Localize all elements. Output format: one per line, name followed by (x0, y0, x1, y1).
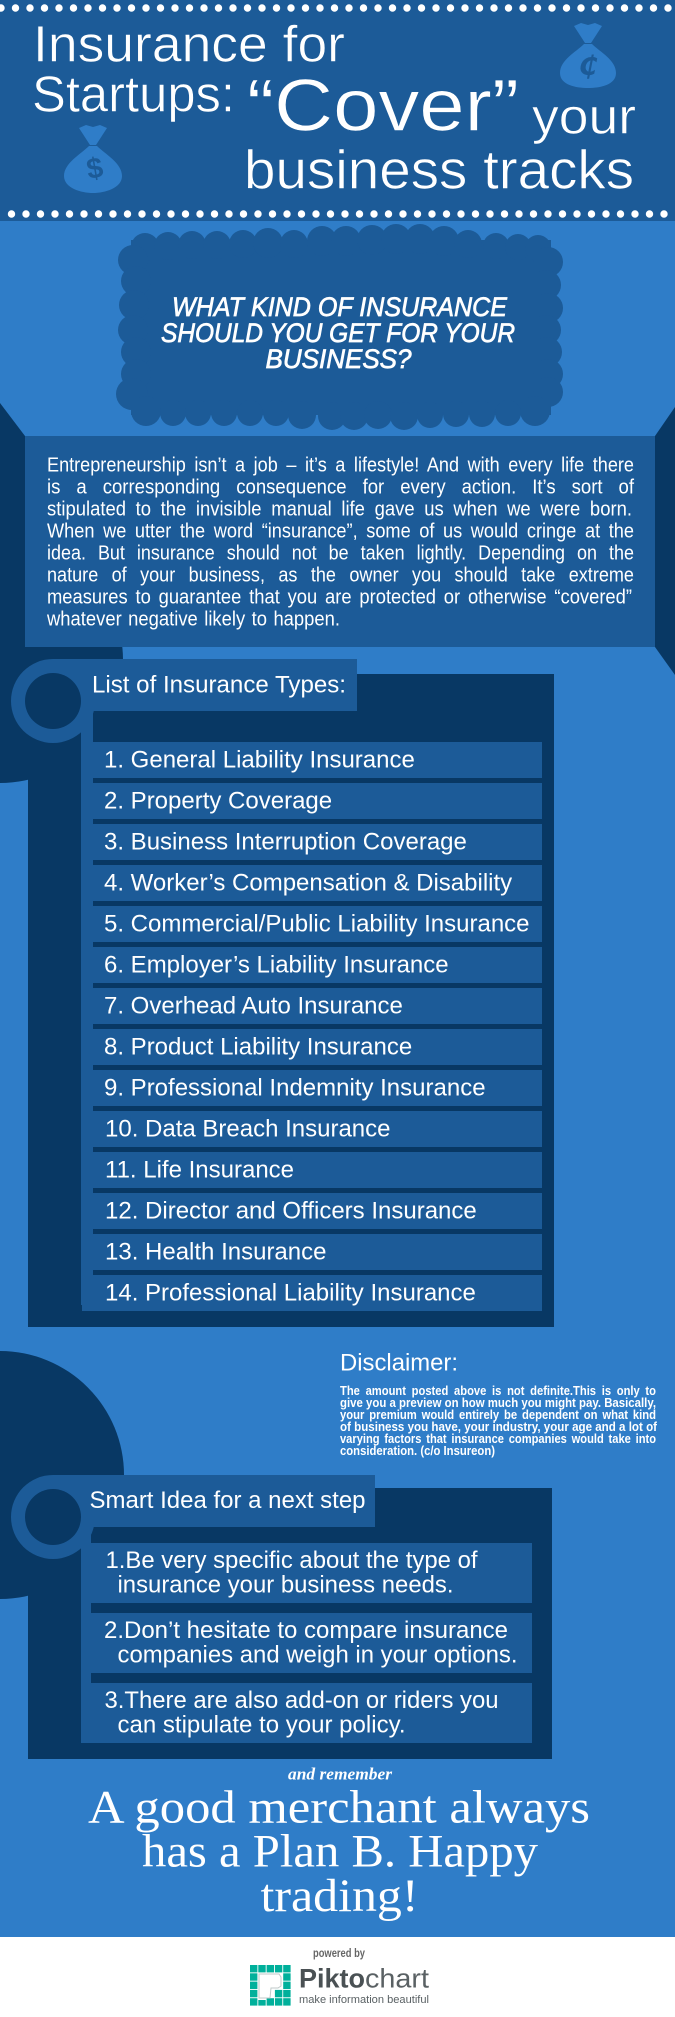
list heading ribbon (25, 659, 357, 729)
disclaimer: Disclaimer: (340, 1350, 458, 1377)
list item 7 (93, 988, 542, 1024)
icon: money bag dollar: $ (84, 152, 106, 186)
icon: money bag cedi (560, 23, 616, 88)
header band (0, 0, 675, 221)
list item 3: 3. Business Interruption Coverage (104, 829, 467, 856)
right navy fold (655, 407, 675, 675)
list item 6: 6. Employer’s Liability Insurance (104, 952, 449, 979)
list item 12 (93, 1193, 542, 1229)
cloud panel (116, 224, 563, 430)
icon: piktochart logo (250, 1965, 291, 2006)
title: business tracks (244, 139, 634, 201)
step 2: companies and weigh in your options. (118, 1642, 518, 1669)
cloud heading: WHAT KIND OF INSURANCE (172, 292, 508, 322)
navy half circle behind list (0, 537, 123, 783)
ring (11, 659, 95, 743)
panel: list of insurance types (11, 659, 554, 1327)
step 1: 1.Be very specific about the type of (106, 1547, 478, 1574)
closing statement (88, 1782, 590, 1922)
cloud heading (161, 292, 515, 374)
list item 13: 13. Health Insurance (105, 1239, 326, 1266)
list item 14 (82, 1275, 542, 1311)
list heading ribbon: List of Insurance Types: (92, 672, 346, 699)
intro panel (25, 436, 655, 647)
list item 14: 14. Professional Liability Insurance (105, 1280, 476, 1307)
piktochart wordmark (299, 1964, 430, 2006)
list item 10 (93, 1111, 542, 1147)
list item 9: 9. Professional Indemnity Insurance (104, 1075, 486, 1102)
navy half circle behind next steps (0, 1351, 124, 1599)
intro paragraph: whatever negative likely to happen. (46, 608, 340, 630)
list item 3 (93, 824, 542, 860)
list item 5: 5. Commercial/Public Liability Insurance (104, 911, 530, 938)
list item 7: 7. Overhead Auto Insurance (104, 993, 403, 1020)
cloud heading: BUSINESS? (266, 344, 412, 374)
title: Startups: (32, 66, 235, 123)
icon: money bag dollar (64, 125, 122, 193)
step 2: 2.Don’t hesitate to compare insurance (104, 1617, 508, 1644)
piktochart wordmark: chart (365, 1964, 430, 1994)
next steps heading ribbon: Smart Idea for a next step (90, 1487, 366, 1514)
step 1 (91, 1543, 532, 1603)
list item 8 (93, 1029, 542, 1065)
ring (11, 1475, 95, 1559)
list item 4 (93, 865, 542, 901)
list item 1: 1. General Liability Insurance (104, 747, 415, 774)
disclaimer (340, 1350, 658, 1458)
list item 2 (93, 783, 542, 819)
list item 11: 11. Life Insurance (105, 1157, 294, 1184)
title: Insurance for (33, 16, 345, 73)
step 2 (91, 1613, 532, 1673)
list item 1 (93, 742, 542, 778)
list item 6 (93, 947, 542, 983)
footer powered by: powered by (313, 1948, 365, 1960)
step 3: 3.There are also add-on or riders you (104, 1687, 498, 1714)
step 1: insurance your business needs. (118, 1572, 454, 1599)
and remember: and remember (288, 1765, 392, 1784)
list item 10: 10. Data Breach Insurance (105, 1116, 391, 1143)
disclaimer body: consideration. (c/o Insureon) (340, 1443, 495, 1458)
list item 11 (93, 1152, 542, 1188)
title: “Cover” (247, 66, 519, 147)
closing statement: has a Plan B. Happy (142, 1826, 539, 1878)
icon: money bag cedi: ₵ (579, 51, 598, 82)
disclaimer body (340, 1383, 658, 1458)
title (32, 16, 636, 201)
list item 4: 4. Worker’s Compensation & Disability (104, 870, 512, 897)
piktochart wordmark: make information beautiful (299, 1994, 429, 2006)
cloud heading: SHOULD YOU GET FOR YOUR (161, 318, 515, 348)
next steps heading ribbon (25, 1475, 375, 1545)
list item 8: 8. Product Liability Insurance (104, 1034, 412, 1061)
list item 2: 2. Property Coverage (104, 788, 332, 815)
piktochart wordmark: Pikto (299, 1964, 365, 1994)
closing statement: A good merchant always (88, 1782, 590, 1834)
panel: smart idea next steps (11, 1475, 552, 1759)
intro paragraph (46, 454, 634, 630)
list item 13 (93, 1234, 542, 1270)
list item 12: 12. Director and Officers Insurance (105, 1198, 477, 1225)
step 3 (81, 1683, 532, 1743)
left navy fold (0, 403, 25, 660)
step 3: can stipulate to your policy. (118, 1712, 406, 1739)
closing statement: trading! (260, 1870, 418, 1922)
list item 9 (93, 1070, 542, 1106)
title: your (532, 88, 636, 144)
